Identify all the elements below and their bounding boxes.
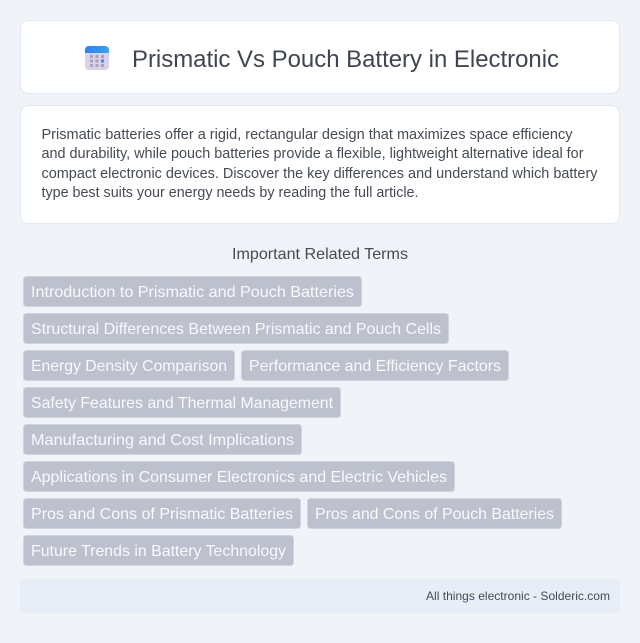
chip: introduction: Introduction to Prismatic and Pouch Batteries xyxy=(31,284,354,301)
chip: safety xyxy=(24,388,340,418)
chip: manufacturing: Manufacturing and Cost Implications xyxy=(31,432,294,449)
chip: pros and cons pouch: Pros and Cons of Pouch Batteries xyxy=(315,506,554,523)
description text xyxy=(42,127,598,201)
panel: term chips xyxy=(24,276,562,566)
panel: description xyxy=(20,106,620,224)
chip: future trends: Future Trends in Battery Technology xyxy=(31,543,286,560)
chip: introduction xyxy=(24,276,362,306)
icon: calendar grid xyxy=(85,46,109,70)
footer: All things electronic - Solderic.com xyxy=(426,589,610,603)
description text: Prismatic batteries offer a rigid, rectangular design that maximizes space efficiency xyxy=(42,127,573,143)
chip: applications: Applications in Consumer Electronics and Electric Vehicles xyxy=(31,469,447,486)
chip: energy density: Energy Density Comparison xyxy=(31,358,227,375)
chip: structural differences xyxy=(24,314,448,344)
chip: energy density xyxy=(24,350,234,380)
heading: related terms: Important Related Terms xyxy=(232,246,408,263)
chip: structural differences: Structural Differences Between Prismatic and Pouch Cells xyxy=(31,321,441,338)
chip: performance: Performance and Efficiency Factors xyxy=(249,358,501,375)
chip: manufacturing xyxy=(24,424,302,454)
description text: and durability, while pouch batteries provide a flexible, lightweight alternative ideal for xyxy=(42,146,584,162)
chip: safety: Safety Features and Thermal Management xyxy=(31,395,334,412)
footer xyxy=(20,579,620,613)
chip: pros and cons pouch xyxy=(308,498,562,528)
title: Prismatic Vs Pouch Battery in Electronic xyxy=(132,46,559,73)
panel: header xyxy=(20,20,620,94)
chip: pros and cons prismatic: Pros and Cons of Prismatic Batteries xyxy=(31,506,293,523)
chip: future trends xyxy=(24,536,294,566)
chip: pros and cons prismatic xyxy=(24,498,300,528)
description text: compact electronic devices. Discover the key differences and understand which battery xyxy=(42,166,598,182)
description text: type best suits your energy needs by reading the full article. xyxy=(42,185,418,201)
chip: performance xyxy=(242,350,508,380)
chip: applications xyxy=(24,462,454,492)
